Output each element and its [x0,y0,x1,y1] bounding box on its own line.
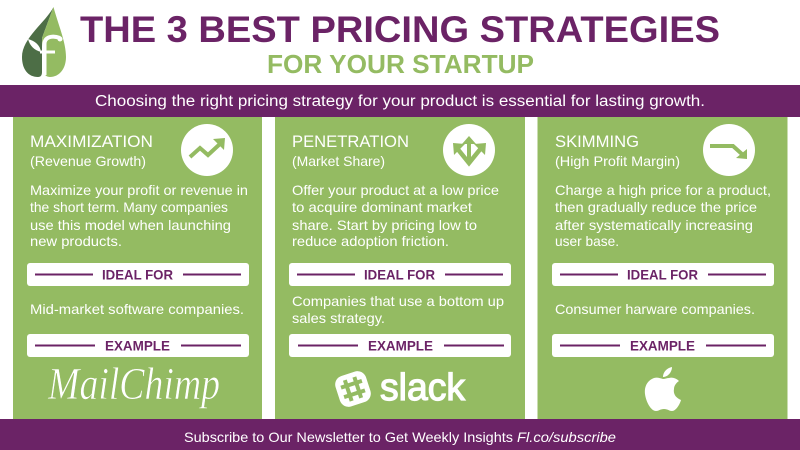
label: ideal for [27,263,249,286]
ideal for text: sales strategy. [292,310,385,326]
description: Maximize your profit or revenue in [30,182,248,198]
label: ideal for: IDEAL FOR [102,266,173,282]
ideal for text: Companies that use a bottom up [292,293,504,309]
logo: slack [333,367,466,409]
icon: split arrows [443,124,495,176]
label: ideal for [552,263,774,286]
description: then gradually reduce the price [555,199,757,215]
logo: mailchimp: MailChimp [47,359,220,409]
icon: falling arrow [703,124,755,176]
description [555,182,771,249]
label: example: EXAMPLE [105,338,170,354]
description [292,182,499,249]
description: reduce adoption friction. [292,233,449,249]
subheading: market share: (Market Share) [292,153,385,169]
description: to acquire dominant market [292,199,472,215]
description: use this model when launching [30,217,231,233]
label: ideal for: IDEAL FOR [627,266,698,282]
description: Offer your product at a low price [292,182,499,198]
logo: slack: slack [380,367,466,409]
ideal for text: Consumer harware companies. [555,301,755,317]
footer [0,419,800,450]
description: new products. [30,233,122,249]
description: user base. [555,233,619,249]
logo: leaf [22,7,66,77]
label: example [552,334,774,357]
label: example: EXAMPLE [630,338,695,354]
panel: penetration [275,117,525,420]
footer: Subscribe to Our Newsletter to Get Weekly Insights [184,429,513,445]
label: example [27,334,249,357]
label: example [289,334,511,357]
heading: penetration: PENETRATION [292,133,409,151]
subheading: revenue growth: (Revenue Growth) [30,153,146,169]
description: share. Start by pricing low to [292,217,477,233]
label: example: EXAMPLE [368,338,433,354]
subtitle: FOR YOUR STARTUP [267,49,534,79]
banner: Choosing the right pricing strategy for your product is essential for lasting growth. [95,93,705,110]
panel: maximization [13,117,262,420]
description: the short term. Many companies [30,199,228,215]
panel: skimming [538,117,788,420]
description: after systematically increasing [555,217,753,233]
logo: apple [645,367,681,411]
subheading: high profit margin: (High Profit Margin) [555,153,680,169]
banner [0,85,800,117]
title: THE 3 BEST PRICING STRATEGIES [80,8,720,50]
ideal for text: Mid-market software companies. [30,301,244,317]
heading: skimming: SKIMMING [555,133,639,151]
heading: maximization: MAXIMIZATION [30,133,153,151]
description: Charge a high price for a product, [555,182,771,198]
description [30,182,248,249]
label: ideal for: IDEAL FOR [364,266,435,282]
ideal for text [292,293,504,326]
footer: Fl.co/subscribe [517,429,616,445]
label: ideal for [289,263,511,286]
icon: rising arrow [181,124,233,176]
